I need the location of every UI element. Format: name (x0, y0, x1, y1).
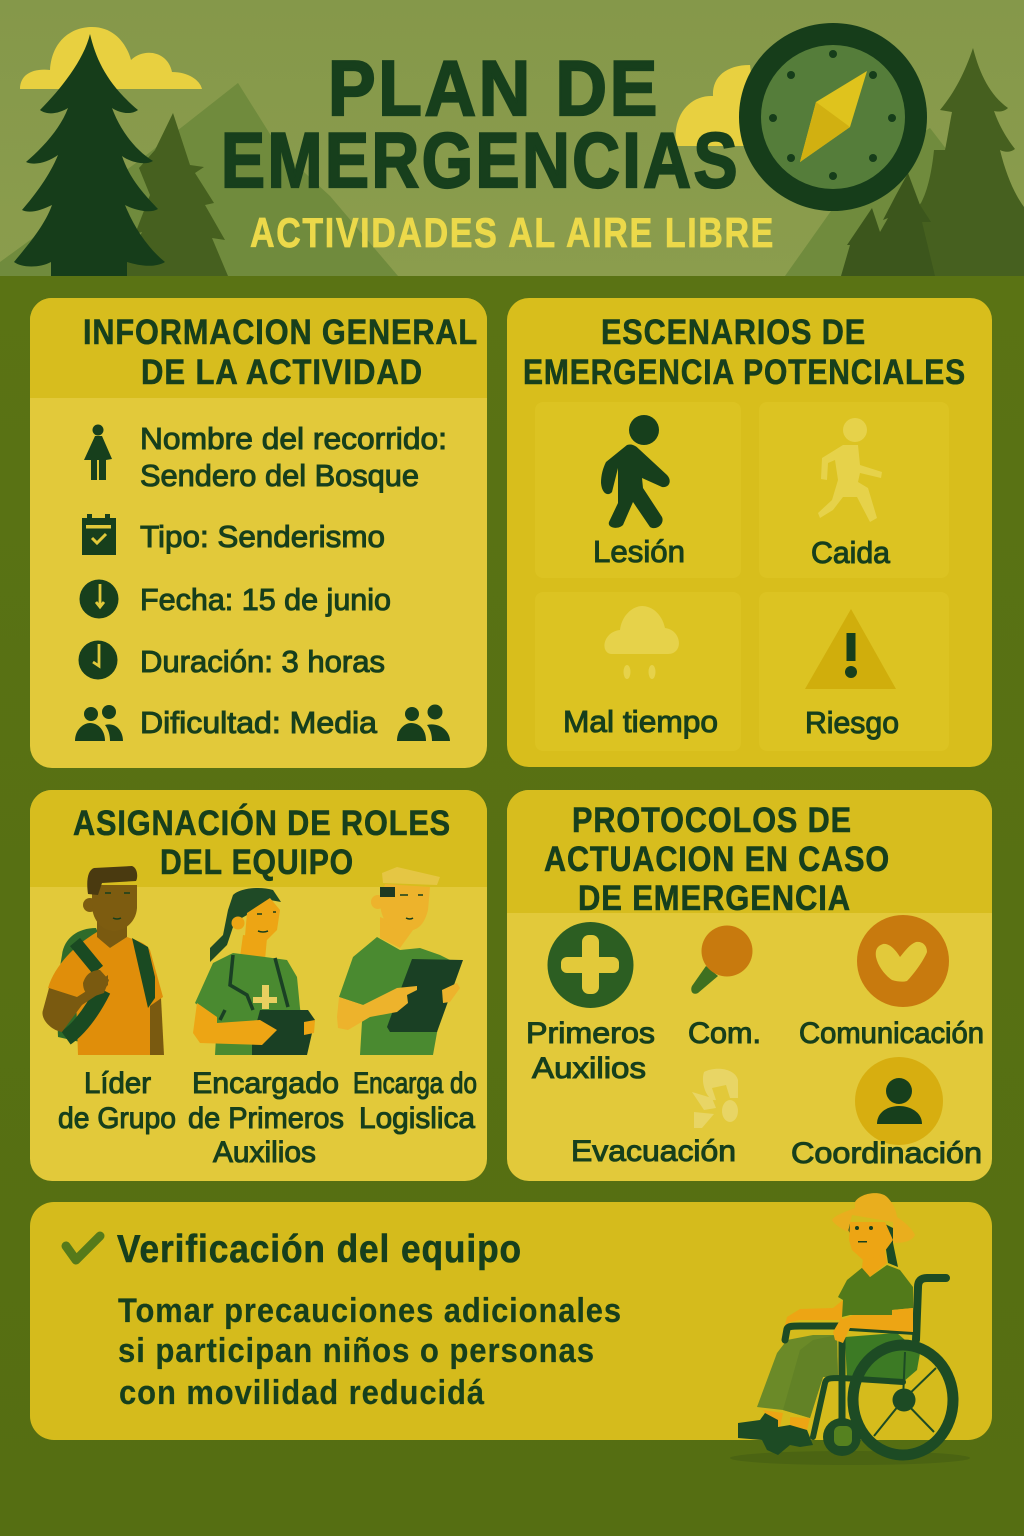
icon: injured walker (601, 415, 670, 528)
figure: lider (42, 866, 164, 1055)
title: EMERGENCIAS (221, 116, 740, 204)
panel: escenarios de emergencia (507, 298, 992, 767)
icon: faint evacuation figure (692, 1069, 738, 1128)
protocol: comunicacion: Comunicación (799, 1017, 984, 1050)
panel: verificacion del equipo (30, 1202, 992, 1440)
card: mal tiempo: Mal tiempo (563, 704, 718, 739)
card: mal tiempo (535, 592, 741, 751)
panel: asignacion de roles (30, 790, 487, 1181)
header scene (0, 23, 1024, 276)
icon: people left (75, 705, 123, 741)
seat and lap (845, 1333, 920, 1382)
protocol: primeros auxilios: Primeros (526, 1017, 655, 1050)
card: riesgo: Riesgo (805, 705, 899, 740)
protocol: com: Com. (688, 1017, 761, 1050)
heading (544, 801, 890, 918)
card: lesion (535, 402, 741, 578)
protocol: primeros auxilios (526, 922, 655, 1085)
icon: check mark (66, 1236, 100, 1260)
protocol: coordinacion (791, 1057, 982, 1170)
row: tipo (82, 514, 385, 555)
row: dificultad: Dificultad: Media (140, 705, 378, 740)
hat (832, 1193, 915, 1243)
row: nombre: Nombre del recorrido: (140, 421, 447, 456)
role labels: de Primeros (188, 1102, 344, 1135)
icon: medical cross (548, 922, 634, 1008)
protocol: coordinacion: Coordinación (791, 1137, 982, 1170)
icon: people right (397, 704, 450, 741)
wheelchair frame (785, 1278, 946, 1437)
heading: ASIGNACIÓN DE ROLES (73, 803, 451, 843)
row: fecha: Fecha: 15 de junio (140, 582, 391, 617)
second pine tree (120, 113, 228, 276)
figure: primeros auxilios (193, 888, 315, 1055)
heading: PROTOCOLOS DE (572, 801, 852, 840)
figure: logistica (337, 867, 463, 1055)
row: duracion: Duración: 3 horas (140, 644, 385, 679)
heading: ESCENARIOS DE (601, 313, 866, 352)
front arm (833, 1308, 913, 1343)
shoes (738, 1413, 813, 1455)
role labels: Auxilios (213, 1136, 316, 1169)
main pine tree (14, 34, 165, 276)
protocol: com (688, 926, 761, 1050)
icon: calendar (82, 514, 116, 555)
icon: person badge (855, 1057, 943, 1145)
neck (862, 1250, 887, 1277)
compass (739, 23, 927, 211)
right cloud (675, 65, 760, 146)
icon: rain cloud (604, 606, 679, 679)
large wheel (853, 1345, 953, 1455)
heading: ACTUACION EN CASO (544, 840, 890, 879)
icon: heart badge (857, 915, 949, 1007)
role labels: Logislica (359, 1102, 475, 1135)
role labels: Líder (84, 1067, 151, 1100)
role labels: de Grupo (58, 1102, 176, 1135)
protocol: evacuacion (571, 1069, 738, 1168)
title: PLAN DE (328, 44, 660, 132)
heading: INFORMACION GENERAL (83, 313, 478, 352)
heading: DE LA ACTIVIDAD (141, 353, 423, 392)
caster wheel (823, 1418, 861, 1456)
heading: DEL EQUIPO (160, 843, 354, 882)
text block: si participan niños o personas (118, 1332, 595, 1370)
torso (838, 1265, 913, 1317)
row: nombre: Sendero del Bosque (140, 458, 419, 493)
left cloud (20, 27, 202, 89)
role labels: Encargado (192, 1067, 339, 1100)
icon: clock (80, 580, 118, 618)
right pine trees (841, 48, 1024, 276)
protocol: evacuacion: Evacuación (571, 1135, 736, 1168)
heading (83, 313, 478, 392)
text block (118, 1292, 622, 1412)
text block: Tomar precauciones adicionales (118, 1292, 622, 1330)
card: caida: Caida (811, 535, 891, 570)
role labels: Encarga do (353, 1067, 477, 1100)
icon: falling figure (818, 418, 882, 522)
card: caida (759, 402, 949, 578)
icon: signal marker (691, 926, 752, 994)
heading: DE EMERGENCIA (578, 879, 851, 918)
subtitle: ACTIVIDADES AL AIRE LIBRE (250, 209, 775, 256)
card: riesgo (759, 592, 949, 751)
text block: con movilidad reducidá (119, 1374, 485, 1412)
row: nombre (84, 421, 447, 493)
figure: person in wheelchair (730, 1193, 970, 1465)
panel: informacion general (30, 298, 487, 768)
card: lesion: Lesión (593, 534, 685, 569)
icon: person (84, 424, 112, 480)
icon: clock (78, 640, 118, 680)
back arm (783, 1300, 843, 1333)
heading (523, 313, 966, 392)
face (849, 1222, 893, 1260)
hair (845, 1222, 898, 1267)
protocol: comunicacion (799, 915, 984, 1050)
role labels (58, 1067, 477, 1169)
heading (73, 803, 451, 882)
icon: warning triangle (805, 609, 896, 689)
heading: Verificación del equipo (117, 1228, 522, 1271)
row: dificultad (75, 704, 450, 741)
protocol: primeros auxilios: Auxilios (532, 1052, 646, 1085)
legs (757, 1335, 838, 1418)
face details (855, 1226, 873, 1242)
title (221, 44, 740, 204)
background mountains (0, 83, 1024, 276)
row: tipo: Tipo: Senderismo (140, 519, 385, 554)
panel: protocolos de actuacion (507, 790, 992, 1181)
